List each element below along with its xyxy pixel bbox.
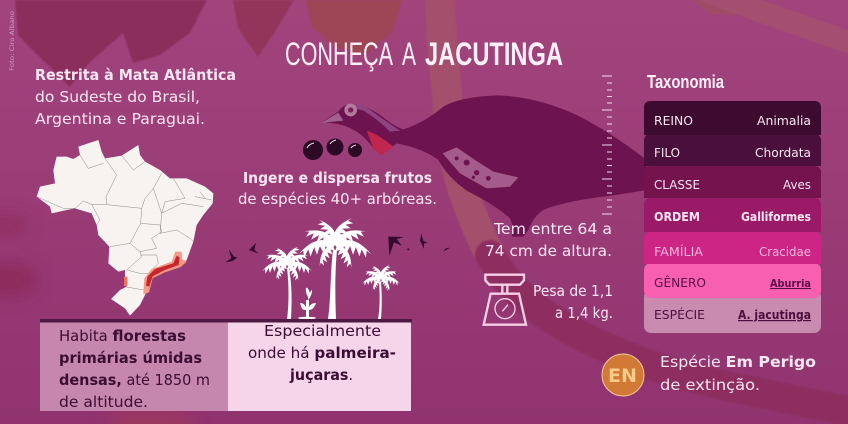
title: JACUTINGA	[425, 36, 563, 72]
birds flock	[225, 233, 450, 262]
row: gênero: Aburria	[770, 278, 811, 290]
text: conservation status: Espécie Em Perigo	[660, 353, 816, 371]
text: diet: de espécies 40+ arbóreas.	[238, 190, 437, 208]
row: espécie	[644, 290, 821, 333]
row: filo	[644, 134, 821, 166]
palm: centre	[299, 215, 371, 319]
background photo: branches	[440, 0, 848, 414]
palm: right	[362, 263, 400, 319]
background photo: blurred foliage	[0, 213, 195, 424]
table: taxonomy	[644, 101, 821, 333]
text: conservation status: de extinção.	[660, 376, 760, 394]
row: reino: Animalia	[757, 114, 811, 128]
icon: endangered badge: EN	[608, 365, 637, 387]
sapling	[298, 288, 316, 319]
fruits	[303, 138, 362, 160]
text: diet	[238, 169, 437, 208]
row: ordem: ORDEM	[654, 210, 700, 224]
row: filo: FILO	[654, 146, 680, 160]
text: forests: primárias úmidas	[59, 349, 202, 367]
text: weight: Pesa de 1,1	[533, 282, 613, 300]
red wattle	[367, 131, 393, 155]
text: palms: onde há palmeira-	[248, 344, 396, 362]
title	[285, 36, 563, 72]
map of Brazil	[37, 140, 213, 316]
text: palms	[248, 322, 396, 384]
wing patch	[443, 147, 518, 188]
row: classe	[644, 166, 821, 198]
palm: left	[262, 244, 312, 319]
background photo: leaves	[15, 0, 745, 87]
title: CONHEÇA	[285, 36, 393, 72]
panel: habitat	[40, 319, 412, 411]
text: forests	[59, 327, 210, 411]
state borders	[37, 155, 212, 290]
row: gênero: GÊNERO	[654, 275, 706, 290]
text: forests: Habita florestas	[59, 327, 186, 345]
text: height: 74 cm de altura.	[485, 242, 612, 260]
text: diet: Ingere e dispersa frutos	[243, 169, 432, 187]
row: classe: CLASSE	[654, 178, 700, 192]
row: família: Cracidae	[759, 245, 811, 259]
text: conservation status	[660, 353, 816, 394]
icon: endangered badge	[602, 354, 644, 396]
text: palms: juçaras.	[289, 366, 353, 384]
row: classe: Aves	[783, 178, 811, 192]
row: ordem: Galliformes	[741, 210, 811, 224]
text: weight: a 1,4 kg.	[555, 304, 613, 322]
row: filo: Chordata	[755, 146, 811, 160]
text: forests: densas, até 1850 m	[59, 371, 210, 389]
text: range: do Sudeste do Brasil,	[35, 88, 200, 106]
title: A	[402, 36, 416, 72]
text: height	[485, 220, 612, 260]
text: height: Tem entre 64 a	[493, 220, 612, 238]
text: forests: de altitude.	[59, 393, 148, 411]
photo credit: Foto: Ciro Albano	[8, 11, 16, 71]
row: reino	[644, 101, 821, 135]
row: espécie: ESPÉCIE	[654, 307, 705, 322]
row: família: FAMÍLIA	[654, 244, 704, 259]
row: gênero	[644, 263, 821, 298]
row: família	[644, 232, 821, 264]
row: ordem	[644, 198, 821, 232]
icon: weighing scale	[484, 275, 526, 325]
heading: taxonomy: Taxonomia	[647, 72, 725, 92]
bird illustration: jacutinga	[321, 95, 647, 237]
text: range: Argentina e Paraguai.	[35, 110, 205, 128]
text: range	[35, 66, 236, 128]
text: range: Restrita à Mata Atlântica	[35, 66, 236, 84]
text: weight	[533, 282, 613, 322]
text: palms: Especialmente	[264, 322, 381, 340]
palm trees	[262, 215, 400, 319]
row: espécie: A. jacutinga	[738, 308, 811, 322]
distribution in Atlantic Forest	[143, 252, 187, 294]
height ruler	[602, 76, 612, 214]
row: reino: REINO	[654, 114, 693, 128]
